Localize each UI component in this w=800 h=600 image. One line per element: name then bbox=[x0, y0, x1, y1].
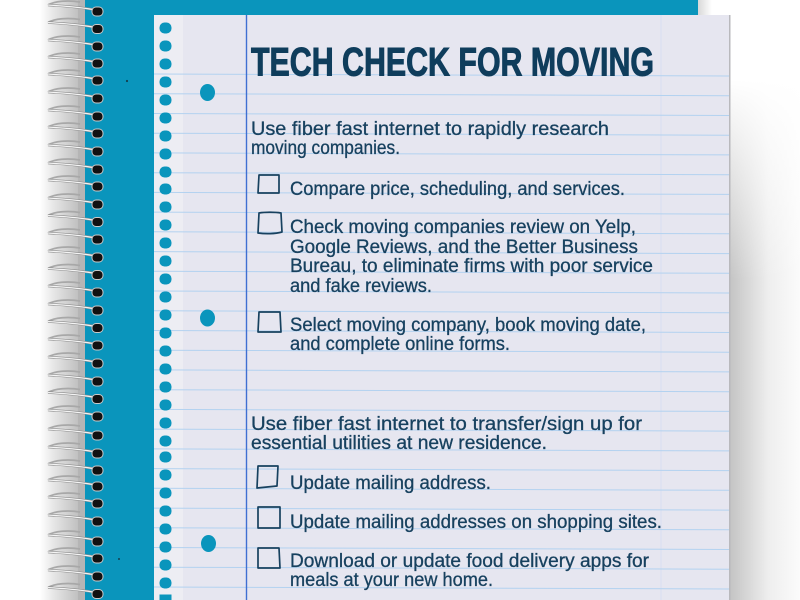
checkbox bbox=[257, 466, 278, 488]
checklist item: delivery apps: Download or update food delivery apps for bbox=[290, 550, 649, 572]
binder holes bbox=[200, 84, 216, 552]
checklist item: reviews: and fake reviews. bbox=[290, 275, 432, 297]
checklist item: mailing address bbox=[257, 466, 491, 494]
checklist item: select bbox=[258, 312, 646, 355]
checklist item: mailing address: Update mailing address. bbox=[290, 472, 491, 494]
checklist item: compare: Compare price, scheduling, and services. bbox=[290, 178, 625, 200]
checklist item: reviews: Google Reviews, and the Better Business bbox=[290, 236, 638, 258]
section 2 intro bbox=[251, 413, 643, 454]
notebook cover bbox=[85, 0, 698, 600]
checklist item: reviews: Bureau, to eliminate firms with poor service bbox=[290, 255, 653, 277]
page shadow: right side bbox=[698, 0, 800, 600]
checklist item: delivery apps: meals at your new home. bbox=[290, 569, 493, 591]
section 1 intro: moving companies. bbox=[251, 137, 400, 159]
section 1 intro bbox=[251, 118, 609, 159]
spiral binding bbox=[48, 0, 103, 600]
title: TECH CHECK FOR MOVING bbox=[251, 40, 654, 84]
checkbox bbox=[258, 175, 279, 193]
page shadow: spiral side bbox=[40, 0, 86, 600]
checklist item: select: and complete online forms. bbox=[290, 333, 510, 355]
checkbox bbox=[258, 548, 280, 568]
section 2 intro: Use fiber fast internet to transfer/sign up for bbox=[251, 413, 643, 435]
punched edge holes bbox=[160, 22, 172, 600]
checkbox bbox=[258, 312, 281, 332]
checklist item: shopping sites: Update mailing addresses on shopping sites. bbox=[290, 511, 662, 533]
checkbox bbox=[258, 212, 282, 234]
checkbox bbox=[258, 507, 280, 528]
checklist item: reviews bbox=[258, 212, 653, 297]
notebook paper bbox=[154, 15, 730, 600]
checklist item: delivery apps bbox=[258, 548, 649, 591]
checklist item: reviews: Check moving companies review on Yelp, bbox=[290, 216, 636, 238]
section 2 intro: essential utilities at new residence. bbox=[251, 432, 547, 454]
checklist item: select: Select moving company, book moving date, bbox=[290, 314, 646, 336]
section 1 intro: Use fiber fast internet to rapidly research bbox=[251, 118, 609, 140]
